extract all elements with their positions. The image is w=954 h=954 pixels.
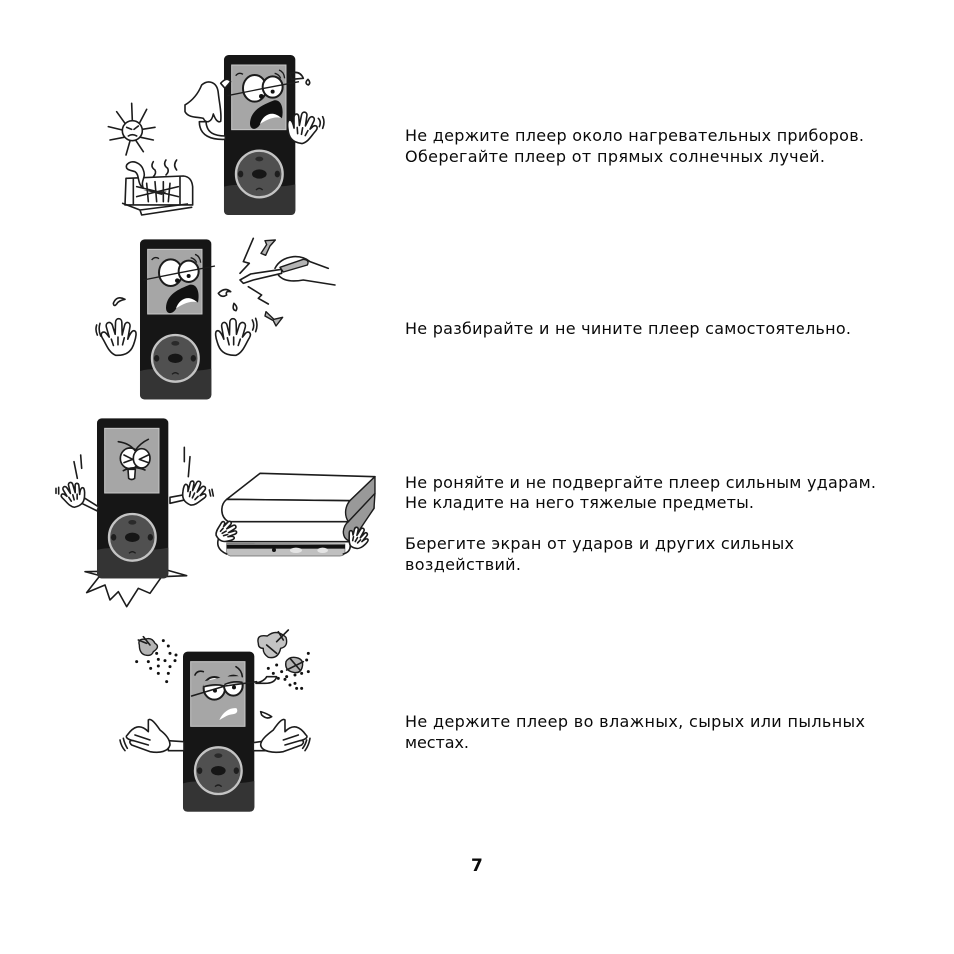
dust particles <box>135 639 310 690</box>
illustration: shock and heavy objects <box>56 418 375 607</box>
tool: screwdriver and hand <box>240 238 335 326</box>
illustration: heat and sun warning <box>108 55 324 215</box>
icon: sun <box>108 103 155 155</box>
illustration: humidity and dust <box>120 630 310 812</box>
motion marks <box>96 290 257 336</box>
text block: humidity warning: местах. <box>405 733 469 752</box>
text block: heat warning: Не держите плеер около нагревательных приборов. <box>405 126 864 145</box>
text block: screen care: воздействий. <box>405 555 521 574</box>
text block: shock warning: Не роняйте и не подвергайте плеер сильным ударам. <box>405 473 876 492</box>
impact burst <box>85 570 187 607</box>
face: scared <box>143 254 215 313</box>
sweat and motion marks <box>290 72 324 128</box>
illustration: do not disassemble <box>96 238 335 399</box>
face: pained <box>118 439 150 479</box>
player 2 <box>140 239 211 399</box>
page number: 7 <box>471 856 483 876</box>
text block: heat warning: Оберегайте плеер от прямых солнечных лучей. <box>405 147 825 166</box>
hands <box>101 319 136 355</box>
hands <box>120 677 310 752</box>
hand right <box>285 110 319 146</box>
player 3 <box>97 418 168 578</box>
hands and arms <box>56 447 213 511</box>
icon: heater <box>123 160 193 215</box>
dust clouds <box>138 630 303 673</box>
books pressing player <box>212 473 375 556</box>
text block: humidity warning: Не держите плеер во влажных, сырых или пыльных <box>405 712 865 731</box>
player 1 <box>224 55 295 215</box>
text block: shock warning: Не кладите на него тяжелые предметы. <box>405 493 754 512</box>
face: sad <box>192 667 257 720</box>
icon: cloth <box>185 79 231 139</box>
text block: do not disassemble: Не разбирайте и не чините плеер самостоятельно. <box>405 319 851 338</box>
text block: screen care: Берегите экран от ударов и других сильных <box>405 534 794 553</box>
player 4 <box>183 652 254 812</box>
face: scared <box>227 70 299 129</box>
